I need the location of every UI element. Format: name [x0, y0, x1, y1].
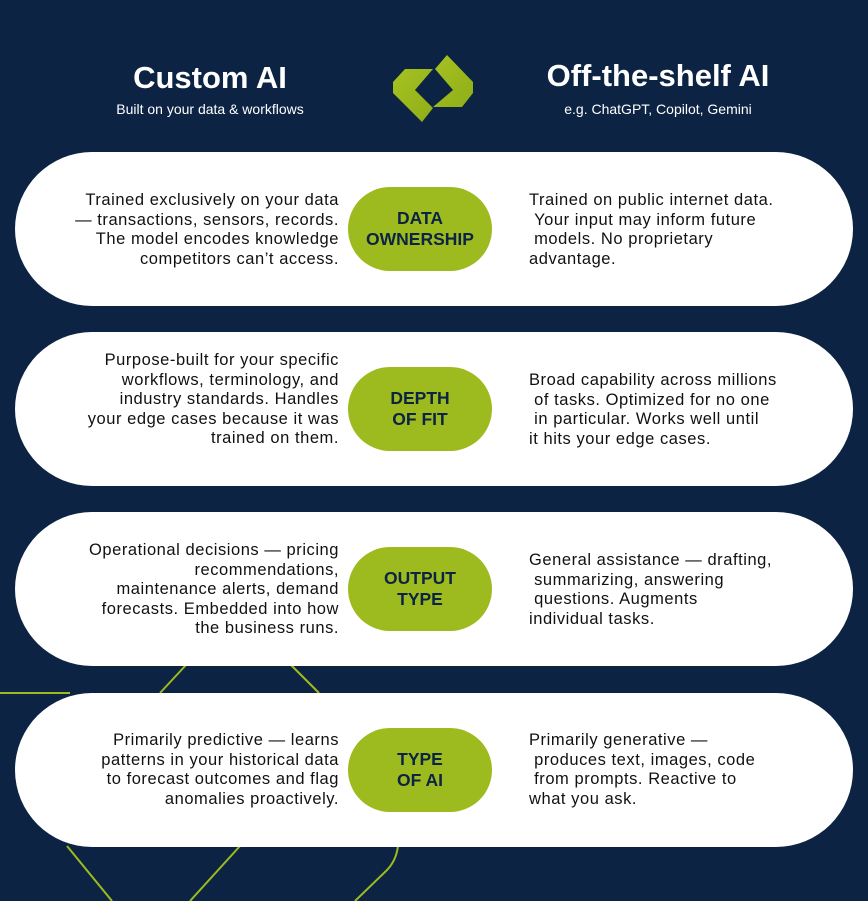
text: off-the-shelf type of AI: what you ask.: [529, 790, 637, 808]
text: custom data ownership: [75, 191, 339, 268]
text: custom type of AI: Primarily predictive — learns: [113, 731, 339, 749]
text: off-the-shelf type of AI: Primarily generative —: [529, 731, 708, 749]
text: custom data ownership: — transactions, sensors, records.: [75, 211, 339, 229]
label: data ownership: [348, 187, 492, 271]
label: data ownership: DATA: [397, 208, 443, 228]
subtitle: custom AI: Built on your data & workflows: [116, 101, 304, 117]
label: depth of fit: [348, 367, 492, 451]
text: off-the-shelf data ownership: Trained on public internet data.: [529, 191, 773, 209]
text: off-the-shelf output type: summarizing, answering: [534, 571, 724, 589]
text: custom depth of fit: workflows, terminology, and: [122, 371, 339, 389]
subtitle: off-the-shelf AI: e.g. ChatGPT, Copilot, Gemini: [564, 101, 752, 117]
label: output type: [348, 547, 492, 631]
text: custom output type: the business runs.: [195, 619, 339, 637]
text: custom data ownership: The model encodes knowledge: [96, 230, 339, 248]
text: off-the-shelf type of AI: [529, 731, 755, 808]
text: custom type of AI: patterns in your historical data: [101, 751, 339, 769]
label: depth of fit: DEPTH: [390, 388, 450, 408]
text: off-the-shelf data ownership: [529, 191, 773, 268]
panel: output type: [15, 512, 853, 666]
text: off-the-shelf output type: individual tasks.: [529, 610, 655, 628]
text: off-the-shelf depth of fit: [529, 371, 777, 448]
text: off-the-shelf output type: [529, 551, 772, 628]
text: custom type of AI: to forecast outcomes and flag: [107, 770, 339, 788]
text: custom type of AI: [101, 731, 339, 808]
panel: depth of fit: [15, 332, 853, 486]
label: type of AI: TYPE: [397, 749, 443, 769]
text: custom depth of fit: [88, 351, 339, 447]
text: off-the-shelf data ownership: advantage.: [529, 250, 616, 268]
text: custom data ownership: competitors can’t access.: [140, 250, 339, 268]
text: off-the-shelf depth of fit: of tasks. Optimized for no one: [534, 391, 770, 409]
label: type of AI: OF AI: [397, 770, 443, 790]
text: custom depth of fit: Purpose-built for your specific: [105, 351, 339, 369]
text: custom output type: recommendations,: [194, 561, 339, 579]
icon: logo: [393, 55, 473, 122]
label: depth of fit: OF FIT: [392, 409, 448, 429]
text: custom output type: [89, 541, 339, 637]
text: off-the-shelf type of AI: produces text, images, code: [534, 751, 755, 769]
text: off-the-shelf depth of fit: in particular. Works well until: [534, 410, 759, 428]
text: off-the-shelf data ownership: models. No proprietary: [534, 230, 713, 248]
text: custom depth of fit: trained on them.: [211, 429, 339, 447]
text: custom output type: forecasts. Embedded into how: [102, 600, 339, 618]
text: custom output type: maintenance alerts, demand: [116, 580, 339, 598]
text: custom depth of fit: your edge cases because it was: [88, 410, 339, 428]
panel: data ownership: [15, 152, 853, 306]
text: custom depth of fit: industry standards. Handles: [120, 390, 339, 408]
text: off-the-shelf data ownership: Your input may inform future: [534, 211, 756, 229]
label: data ownership: OWNERSHIP: [366, 229, 474, 249]
text: off-the-shelf type of AI: from prompts. Reactive to: [534, 770, 737, 788]
text: off-the-shelf output type: General assistance — drafting,: [529, 551, 772, 569]
text: custom data ownership: Trained exclusively on your data: [85, 191, 339, 209]
label: type of AI: [348, 728, 492, 812]
text: custom output type: Operational decisions — pricing: [89, 541, 339, 559]
text: off-the-shelf depth of fit: it hits your edge cases.: [529, 430, 711, 448]
label: output type: OUTPUT: [384, 568, 456, 588]
title: custom AI: Custom AI: [133, 60, 287, 95]
text: off-the-shelf depth of fit: Broad capability across millions: [529, 371, 777, 389]
title: off-the-shelf AI: Off-the-shelf AI: [547, 58, 769, 93]
text: off-the-shelf output type: questions. Augments: [534, 590, 698, 608]
panel: type of AI: [15, 693, 853, 847]
text: custom type of AI: anomalies proactively.: [165, 790, 339, 808]
label: output type: TYPE: [397, 589, 443, 609]
